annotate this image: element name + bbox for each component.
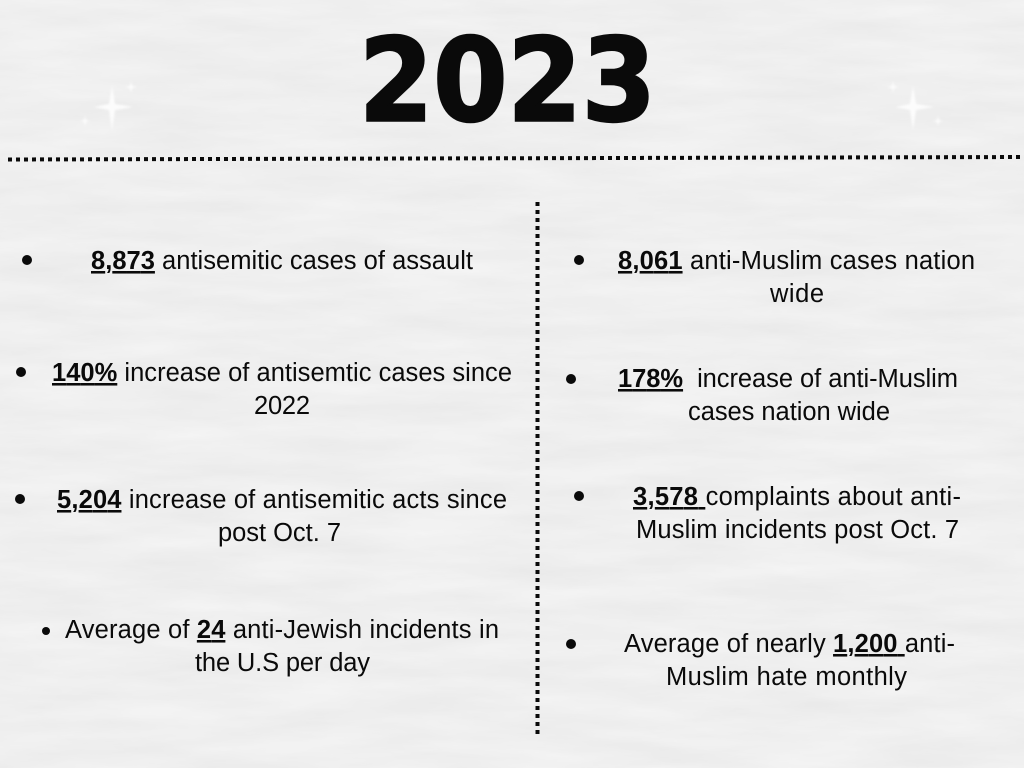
- vertical dotted divider: [536, 202, 540, 734]
- stat: 8,873 assault cases: 8,873 antisemitic cases of assault: [91, 247, 473, 275]
- stat: 24 incidents per day: Average of 24 anti-Jewish incidents in: [65, 616, 499, 644]
- stat: 140% increase: [16, 359, 512, 420]
- stat: 5,204 increase: 5,204 increase of antisemitic acts since: [57, 486, 507, 514]
- horizontal dotted divider: [8, 157, 1024, 160]
- stat: 178% increase: cases nation wide: [688, 398, 890, 426]
- panel: antisemitic statistics: [15, 247, 512, 677]
- icon: left sparkles: [80, 81, 137, 130]
- stat: 3,578 complaints: Muslim incidents post Oct. 7: [636, 516, 959, 544]
- stat: 1,200 monthly: Average of nearly 1,200 anti-: [624, 630, 955, 658]
- stat: 24 incidents per day: the U.S per day: [195, 649, 370, 677]
- stat: 8,061 cases: [574, 247, 975, 308]
- panel: anti-Muslim statistics: [566, 247, 975, 691]
- stat: 3,578 complaints: 3,578 complaints about anti-: [633, 483, 961, 511]
- stat: 8,061 cases: 8,061 anti-Muslim cases nation: [618, 247, 975, 275]
- stat: 24 incidents per day: [42, 616, 499, 677]
- stat: 5,204 increase: post Oct. 7: [218, 519, 341, 547]
- stat: 140% increase: 2022: [254, 392, 310, 420]
- stat: 178% increase: [566, 365, 958, 426]
- stat: 1,200 monthly: Muslim hate monthly: [666, 663, 907, 691]
- stat: 3,578 complaints: [574, 483, 961, 544]
- icon: right sparkles: [887, 81, 943, 130]
- title: 2023: [359, 14, 656, 148]
- stat: 1,200 monthly: [566, 630, 955, 691]
- stat: 5,204 increase: [15, 486, 507, 547]
- stat: 8,061 cases: wide: [769, 280, 824, 308]
- stat: 140% increase: 140% increase of antisemtic cases since: [52, 359, 512, 387]
- stat: 178% increase: 178% increase of anti-Muslim: [618, 365, 958, 393]
